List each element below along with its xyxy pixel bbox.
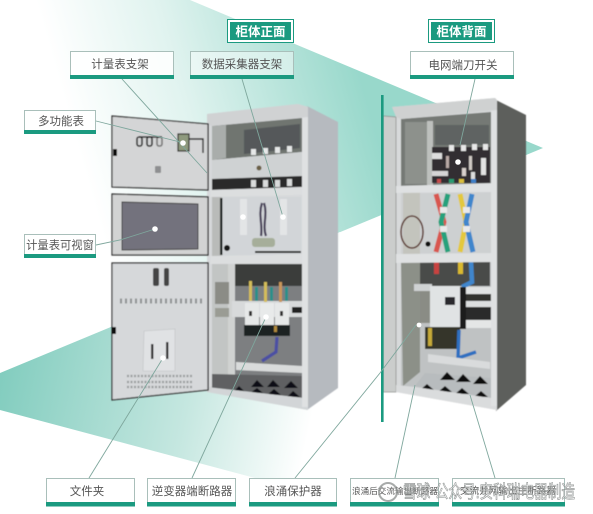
back cabinet xyxy=(383,98,526,411)
background: upper teal light beam xyxy=(0,0,543,373)
label: surge protector: 浪涌保护器 xyxy=(264,484,322,498)
label: post-surge breaker: 浪涌后交流输出断路器 xyxy=(352,485,438,496)
heading: cabinet back: 柜体背面 xyxy=(436,24,487,39)
base plate xyxy=(396,385,497,410)
label: inverter side breaker: 逆变器端断路器 xyxy=(152,484,233,498)
upper compartment xyxy=(212,118,302,190)
back cabinet side panel xyxy=(496,100,526,411)
label: post-surge breaker xyxy=(350,478,439,506)
upper compartment xyxy=(401,112,491,186)
middle compartment xyxy=(212,197,301,256)
heading: cabinet front: 柜体正面 xyxy=(235,24,286,39)
label: grid side knife switch xyxy=(410,52,514,79)
label: far-right component: 交流并网输出主断路器 xyxy=(460,485,556,497)
floor cones xyxy=(233,380,300,397)
label: meter bracket: 计量表支架 xyxy=(91,57,149,71)
door: lower with file pocket xyxy=(112,263,208,400)
label: file holder xyxy=(46,478,135,506)
label: inverter side breaker xyxy=(147,478,236,506)
leader lines xyxy=(89,79,495,478)
heading: cabinet front xyxy=(228,20,294,42)
door: meter viewing window xyxy=(112,194,208,255)
middle compartment with colored busbars xyxy=(401,192,491,254)
front cabinet side panel xyxy=(307,106,338,410)
background: lower teal light beam xyxy=(0,232,340,490)
right frame post xyxy=(491,104,497,406)
label: file holder: 文件夹 xyxy=(70,484,104,498)
top plate xyxy=(392,98,497,119)
label: multifunction meter xyxy=(24,110,96,134)
right frame post xyxy=(302,107,308,407)
label: grid side knife switch: 电网端刀开关 xyxy=(428,58,498,72)
top plate xyxy=(207,104,308,126)
label: data collector bracket xyxy=(190,52,294,79)
door: upper with meter xyxy=(112,116,208,190)
shelf bars xyxy=(210,187,304,264)
front cabinet frame xyxy=(207,104,308,410)
green divider line xyxy=(381,95,384,422)
label: meter bracket xyxy=(70,52,174,79)
lower compartment with main breaker xyxy=(401,262,491,398)
lower compartment xyxy=(212,264,302,398)
base plate xyxy=(207,387,308,410)
open door strip xyxy=(383,116,396,392)
callout marker dots xyxy=(152,140,461,361)
label: data collector bracket: 数据采集器支架 xyxy=(202,57,282,71)
front doors xyxy=(112,116,208,400)
back cabinet frame xyxy=(392,98,497,410)
label: meter viewing window: 计量表可视窗 xyxy=(26,238,94,252)
front cabinet xyxy=(207,104,338,410)
label: meter viewing window xyxy=(24,234,96,258)
heading: cabinet back xyxy=(428,20,494,42)
label: multifunction meter: 多功能表 xyxy=(38,114,84,128)
floor cones xyxy=(420,372,488,397)
label: far-right component xyxy=(452,478,565,506)
label: surge protector xyxy=(249,478,337,506)
shelf bars xyxy=(396,183,496,263)
